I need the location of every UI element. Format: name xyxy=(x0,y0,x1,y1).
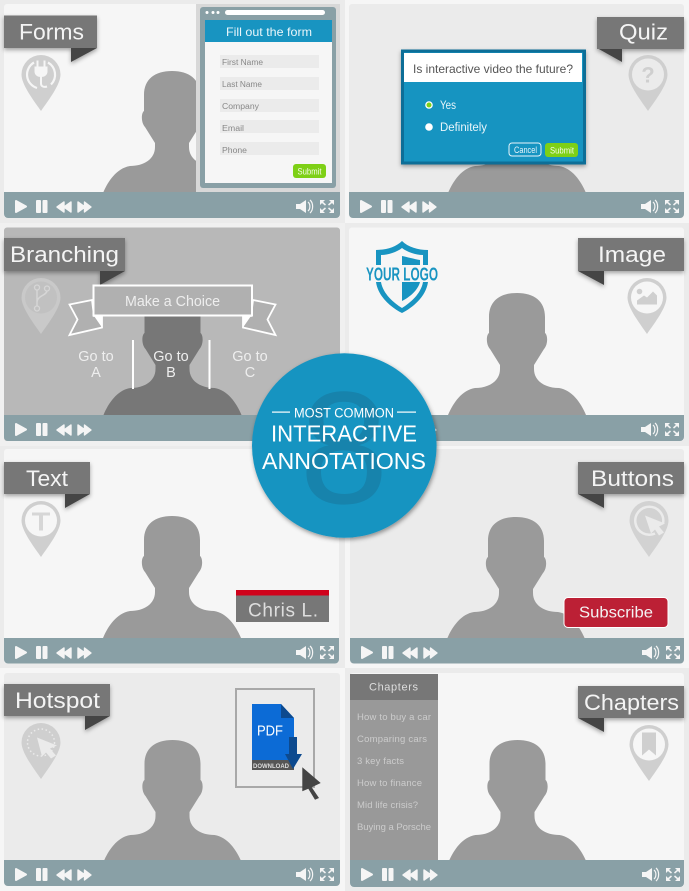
panel: buttons xyxy=(350,449,684,664)
quiz dialog: Yes xyxy=(440,100,456,112)
logo: YOUR LOGO xyxy=(366,264,438,284)
quiz dialog xyxy=(402,51,584,163)
chapter sidebar: Comparing cars xyxy=(357,734,427,745)
control bar xyxy=(350,860,684,887)
ribbon: text: Text xyxy=(26,466,68,491)
form overlay xyxy=(196,4,340,192)
panel: branching xyxy=(4,228,340,441)
choices: Go to xyxy=(153,349,189,365)
quiz dialog: Definitely xyxy=(440,122,487,134)
chapter sidebar xyxy=(350,674,438,860)
form overlay: Last Name xyxy=(222,80,263,89)
logo xyxy=(364,241,440,313)
icon: plug pin xyxy=(22,55,60,111)
choices xyxy=(78,340,268,389)
icon: T pin xyxy=(22,501,60,557)
icon: click pin xyxy=(630,501,668,557)
large number 8: 8 xyxy=(300,358,388,537)
presenter silhouette xyxy=(448,71,586,193)
ribbon: hotspot xyxy=(4,684,110,730)
name caption xyxy=(236,590,329,622)
choices: A xyxy=(91,365,101,381)
ribbon: text xyxy=(4,462,90,508)
presenter silhouette xyxy=(447,517,585,639)
ribbon: quiz: Quiz xyxy=(619,20,668,44)
control bar xyxy=(349,192,684,218)
quiz dialog: Cancel xyxy=(514,145,537,156)
control bar xyxy=(4,860,340,886)
choices: C xyxy=(245,365,255,381)
subscribe button xyxy=(564,598,668,628)
ribbon: branching: Branching xyxy=(10,242,119,267)
panel: chapters xyxy=(350,673,684,887)
ribbon: buttons: Buttons xyxy=(591,466,674,491)
panel: image xyxy=(349,228,684,441)
center badge xyxy=(252,353,437,538)
control bar xyxy=(4,192,340,218)
presenter silhouette xyxy=(104,293,242,415)
ribbon: hotspot: Hotspot xyxy=(15,688,100,713)
subscribe button: Subscribe xyxy=(579,604,653,622)
quiz dialog: Is interactive video the future? xyxy=(413,62,573,76)
presenter silhouette xyxy=(448,740,586,862)
presenter silhouette xyxy=(104,740,242,862)
form overlay: Email xyxy=(222,124,244,133)
ribbon: branching xyxy=(4,238,125,285)
form overlay: First Name xyxy=(222,58,264,67)
choice banner xyxy=(70,286,276,335)
form overlay: Submit xyxy=(298,166,322,178)
ribbon: forms: Forms xyxy=(19,20,84,44)
ribbon: forms xyxy=(4,16,97,62)
name caption: Chris L. xyxy=(248,600,318,622)
form overlay: Fill out the form xyxy=(226,25,312,39)
form overlay: Phone xyxy=(222,146,248,155)
chapter sidebar: Buying a Porsche xyxy=(357,822,431,833)
chapter sidebar: How to buy a car xyxy=(357,712,431,723)
badge title: INTERACTIVE xyxy=(271,420,417,446)
chapter sidebar: 3 key facts xyxy=(357,756,404,767)
choices: Go to xyxy=(78,349,114,365)
ribbon: image xyxy=(578,238,684,285)
icon: picture pin xyxy=(628,278,666,334)
badge title: MOST COMMON xyxy=(294,406,394,420)
ribbon: chapters: Chapters xyxy=(584,690,679,715)
chapter sidebar: Chapters xyxy=(369,682,418,694)
hotspot box with PDF: DOWNLOAD xyxy=(253,763,289,770)
ribbon: buttons xyxy=(578,462,684,508)
choice banner: Make a Choice xyxy=(125,293,220,310)
control bar xyxy=(4,638,339,664)
form overlay: Company xyxy=(222,102,259,111)
icon: bookmark pin xyxy=(630,725,668,781)
ribbon: quiz xyxy=(597,17,684,62)
ribbon: chapters xyxy=(578,686,684,732)
panel: text xyxy=(4,449,339,664)
icon: hotspot pin xyxy=(22,723,60,779)
chapter sidebar: Mid life crisis? xyxy=(357,800,418,811)
control bar xyxy=(350,638,684,664)
chapter sidebar: How to finance xyxy=(357,778,422,789)
icon: branch pin xyxy=(22,278,60,334)
panel: hotspot xyxy=(4,673,340,886)
presenter silhouette xyxy=(448,293,586,415)
panel: forms xyxy=(4,4,340,218)
presenter silhouette xyxy=(103,516,241,638)
icon: question pin: ? xyxy=(641,62,655,88)
choices: B xyxy=(166,365,176,381)
control bar xyxy=(4,415,340,441)
ribbon: image: Image xyxy=(598,242,666,267)
panel: quiz xyxy=(349,4,684,218)
control bar xyxy=(349,415,684,441)
hotspot box with PDF xyxy=(236,689,321,800)
quiz dialog: Submit xyxy=(550,146,574,156)
badge title xyxy=(262,406,426,474)
hotspot box with PDF: PDF xyxy=(257,722,283,740)
badge title: ANNOTATIONS xyxy=(262,448,426,474)
presenter silhouette xyxy=(103,71,241,193)
icon: question pin xyxy=(628,55,668,111)
choices: Go to xyxy=(232,349,268,365)
